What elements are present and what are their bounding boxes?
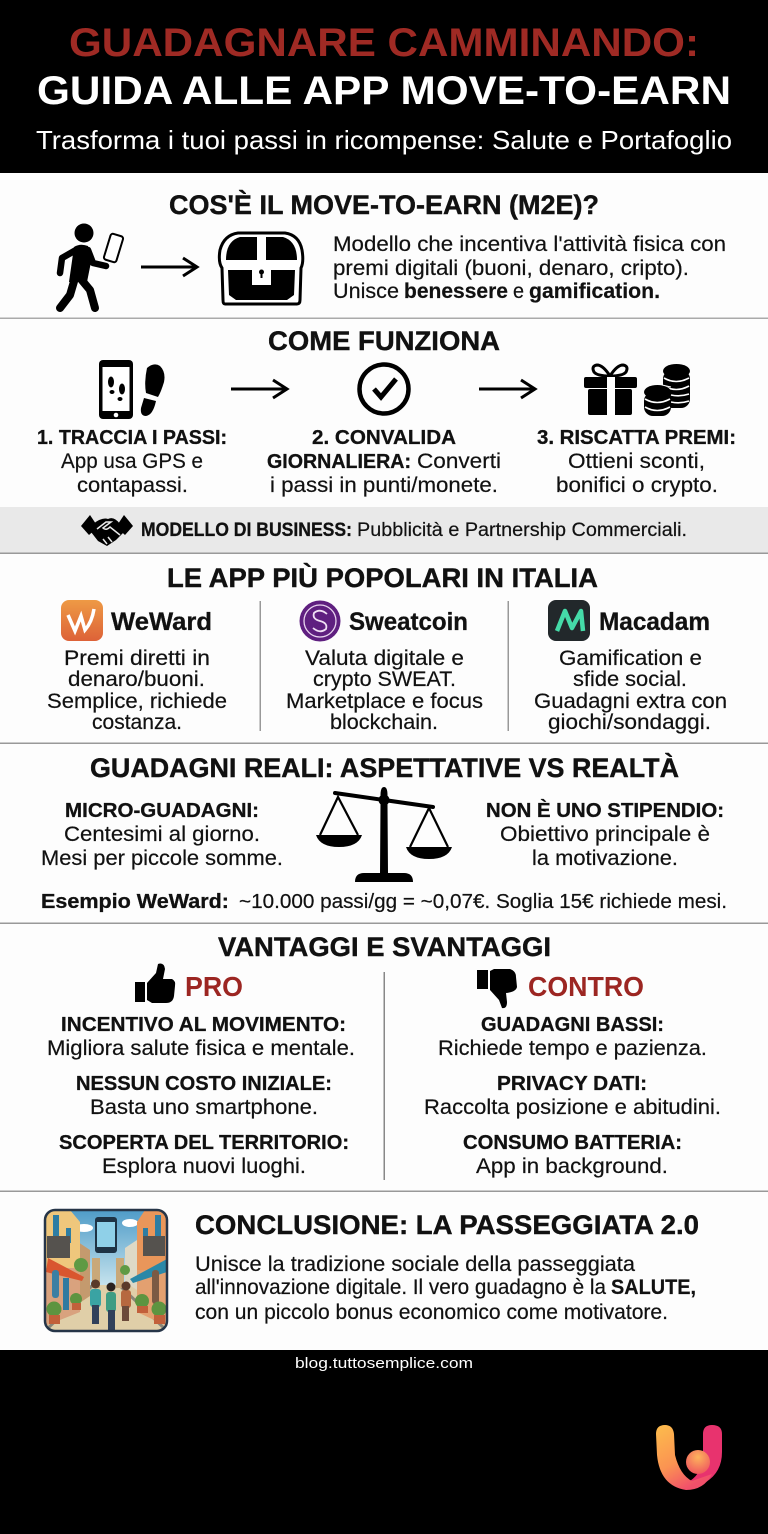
logo — [656, 1425, 722, 1490]
conclusion text — [195, 1253, 696, 1324]
WeWard example: ~10.000 passi/gg = ~0,07€. Soglia 15€ richiede mesi. — [239, 891, 727, 913]
Macadam description — [534, 647, 727, 734]
conclusion text: con un piccolo bonus economico come motivatore. — [195, 1301, 668, 1324]
Sweatcoin description: Valuta digitale e — [305, 647, 464, 670]
panel: footer — [0, 1350, 768, 1534]
cons list: PRIVACY DATI: — [497, 1073, 647, 1095]
step 2 text — [267, 427, 501, 497]
business model text: Pubblicità e Partnership Commerciali. — [357, 520, 687, 541]
step 3 text — [537, 427, 736, 497]
step 3 text: 3. RISCATTA PREMI: — [537, 427, 736, 449]
icon: check circle — [360, 364, 408, 414]
not a salary text: NON È UNO STIPENDIO: — [486, 799, 724, 822]
description: gamification. — [529, 280, 660, 303]
title line 2: GUIDA ALLE APP MOVE-TO-EARN — [37, 69, 731, 113]
Sweatcoin description: Marketplace e focus — [286, 690, 483, 713]
Sweatcoin description: blockchain. — [330, 711, 438, 734]
app: Macadam: Macadam — [599, 608, 710, 636]
step 2 text: 2. CONVALIDA — [312, 427, 456, 449]
step 3 text: bonifici o crypto. — [556, 474, 718, 497]
step 3 text: Ottieni sconti, — [568, 450, 705, 473]
Macadam description: sfide social. — [573, 668, 687, 691]
app: Sweatcoin — [300, 600, 468, 642]
conclusion text: Unisce la tradizione sociale della passeggiata — [195, 1253, 635, 1276]
conclusion text: all'innovazione digitale. Il vero guadagno è la — [195, 1276, 606, 1299]
step 1 text: App usa GPS e — [61, 450, 203, 473]
icon: thumbs down — [477, 969, 517, 1008]
conclusion text: SALUTE, — [611, 1276, 696, 1299]
icon: walking person with phone — [60, 224, 124, 308]
description: Modello che incentiva l'attività fisica con — [333, 233, 726, 256]
cons list: Richiede tempo e pazienza. — [438, 1037, 707, 1060]
description: benessere — [404, 280, 508, 303]
app: WeWard: WeWard — [111, 608, 212, 636]
panel: what is M2E — [60, 189, 726, 308]
step 1 text — [37, 427, 227, 497]
pros list: NESSUN COSTO INIZIALE: — [76, 1073, 332, 1095]
micro earnings text — [41, 800, 283, 870]
icon: thumbs up — [135, 964, 175, 1003]
step 2 text: i passi in punti/monete. — [270, 474, 498, 497]
app: Sweatcoin: Sweatcoin — [349, 608, 468, 636]
panel: how it works — [37, 326, 736, 497]
not a salary text: la motivazione. — [532, 847, 678, 870]
icon: gift and coins — [584, 364, 690, 416]
panel: pros and cons — [47, 932, 721, 1180]
Macadam description: Guadagni extra con — [534, 690, 727, 713]
icon: treasure chest — [219, 233, 303, 304]
step 1 text: contapassi. — [77, 474, 188, 497]
footer url: blog.tuttosemplice.com — [295, 1355, 473, 1372]
step 2 text: Converti — [417, 450, 501, 473]
Sweatcoin description: crypto SWEAT. — [313, 668, 456, 691]
Macadam description: Gamification e — [559, 647, 702, 670]
arrow — [231, 380, 287, 398]
subtitle: Trasforma i tuoi passi in ricompense: Salute e Portafoglio — [36, 125, 732, 155]
pros list: INCENTIVO AL MOVIMENTO: — [61, 1014, 346, 1036]
PRO label: PRO — [185, 971, 243, 1002]
panel: business model band — [0, 507, 768, 554]
Sweatcoin description — [286, 647, 483, 734]
panel: real earnings — [41, 752, 727, 913]
micro earnings text: Mesi per piccole somme. — [41, 847, 283, 870]
pros list: Basta uno smartphone. — [90, 1096, 318, 1119]
Macadam description: giochi/sondaggi. — [548, 711, 711, 734]
app: Macadam — [548, 600, 710, 641]
pros list: Migliora salute fisica e mentale. — [47, 1037, 355, 1060]
icon: handshake — [81, 515, 133, 546]
cons list — [424, 1014, 721, 1178]
icon: balance scale — [316, 787, 452, 882]
not a salary text: Obiettivo principale è — [500, 823, 710, 846]
WeWard description: Semplice, richiede — [47, 690, 227, 713]
panel: popular apps — [47, 562, 727, 734]
panel: conclusion — [45, 1210, 699, 1331]
heading: GUADAGNI REALI: ASPETTATIVE VS REALTÀ — [90, 752, 679, 783]
heading: VANTAGGI E SVANTAGGI — [218, 932, 551, 962]
business model text — [141, 520, 687, 541]
description: e — [513, 280, 524, 303]
step 1 text: 1. TRACCIA I PASSI: — [37, 427, 227, 449]
cons list: App in background. — [476, 1155, 668, 1178]
WeWard description — [47, 647, 227, 734]
pros list: SCOPERTA DEL TERRITORIO: — [59, 1132, 349, 1154]
arrow — [141, 258, 197, 276]
step 2 text: GIORNALIERA: — [267, 451, 411, 473]
WeWard description: Premi diretti in — [64, 647, 210, 670]
not a salary text — [486, 799, 724, 870]
heading: COME FUNZIONA — [268, 326, 500, 356]
title line 1: GUADAGNARE CAMMINANDO: — [69, 21, 699, 65]
micro earnings text: MICRO-GUADAGNI: — [65, 800, 259, 822]
WeWard description: costanza. — [92, 711, 182, 734]
WeWard example — [41, 891, 727, 913]
micro earnings text: Centesimi al giorno. — [64, 823, 260, 846]
business model text: MODELLO DI BUSINESS: — [141, 520, 352, 541]
pros list: Esplora nuovi luoghi. — [102, 1155, 306, 1178]
panel: header — [0, 0, 768, 173]
heading: LE APP PIÙ POPOLARI IN ITALIA — [167, 562, 598, 593]
description: premi digitali (buoni, denaro, cripto). — [333, 257, 689, 280]
cons list: CONSUMO BATTERIA: — [463, 1132, 682, 1154]
pros list — [47, 1014, 355, 1178]
icon: phone and footprints — [99, 360, 164, 419]
description — [333, 233, 726, 303]
description: Unisce — [333, 280, 399, 303]
CONTRO label: CONTRO — [528, 971, 644, 1002]
app: WeWard — [61, 600, 212, 641]
arrow — [479, 380, 535, 398]
cons list: Raccolta posizione e abitudini. — [424, 1096, 721, 1119]
cons list: GUADAGNI BASSI: — [481, 1014, 664, 1036]
WeWard example: Esempio WeWard: — [41, 891, 229, 913]
heading: COS'È IL MOVE-TO-EARN (M2E)? — [169, 189, 599, 220]
heading: CONCLUSIONE: LA PASSEGGIATA 2.0 — [195, 1210, 699, 1240]
WeWard description: denaro/buoni. — [68, 668, 205, 691]
illustration: street walk — [45, 1210, 167, 1331]
